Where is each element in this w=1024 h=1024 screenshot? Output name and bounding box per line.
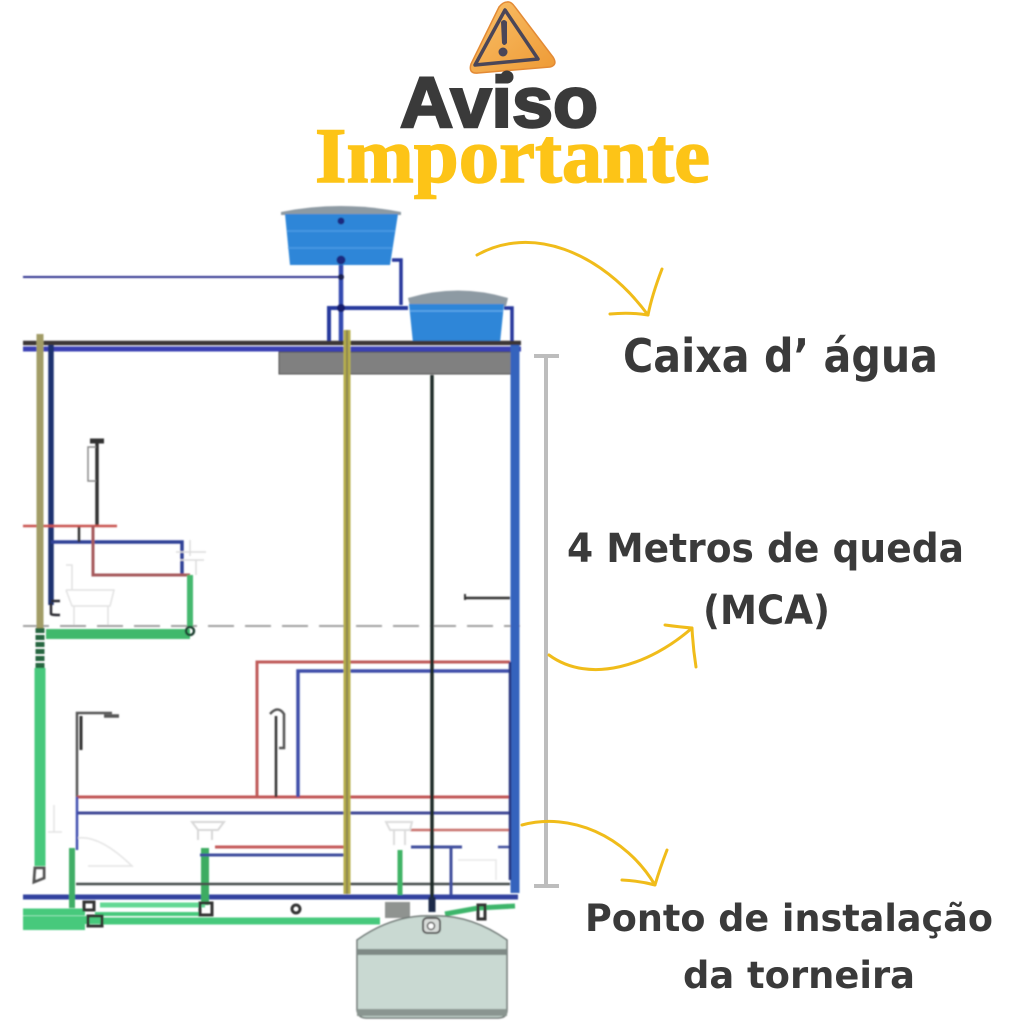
slab — [279, 352, 512, 374]
tank connecting pipes — [23, 260, 512, 345]
arrow: to height label — [549, 625, 696, 670]
height dimension bar — [534, 356, 559, 886]
green drain column — [34, 668, 44, 882]
label: head height — [567, 526, 964, 634]
label: faucet installation point: da torneira — [683, 954, 915, 997]
icon: warning triangle — [470, 2, 555, 73]
label: head height: 4 Metros de queda — [567, 526, 964, 572]
label: water tank: Caixa d’ água — [623, 329, 938, 383]
upper water tank — [281, 206, 401, 265]
toilet outline upper — [66, 565, 114, 625]
ground reservoir tank — [357, 897, 507, 1018]
label: faucet installation point — [585, 897, 993, 997]
bottom green drain pipes — [23, 902, 515, 927]
label: head height: (MCA) — [703, 588, 830, 634]
title: Importante: Importante — [315, 112, 710, 199]
lower water tank — [408, 290, 508, 343]
arrow: to water tank label — [477, 242, 662, 315]
main horizontal pipes — [23, 343, 521, 897]
label: faucet installation point: Ponto de instalação — [585, 897, 993, 940]
upper floor pipes — [23, 334, 194, 670]
lower floor pipes — [72, 594, 512, 908]
arrow: to faucet label — [522, 821, 667, 885]
plumbing diagram — [23, 206, 521, 1018]
sink outline upper — [176, 540, 206, 575]
title: Aviso: Aviso — [400, 64, 598, 143]
vertical risers — [347, 330, 515, 897]
sink and toilet outlines lower — [48, 805, 496, 880]
dashed floor line — [23, 625, 520, 627]
